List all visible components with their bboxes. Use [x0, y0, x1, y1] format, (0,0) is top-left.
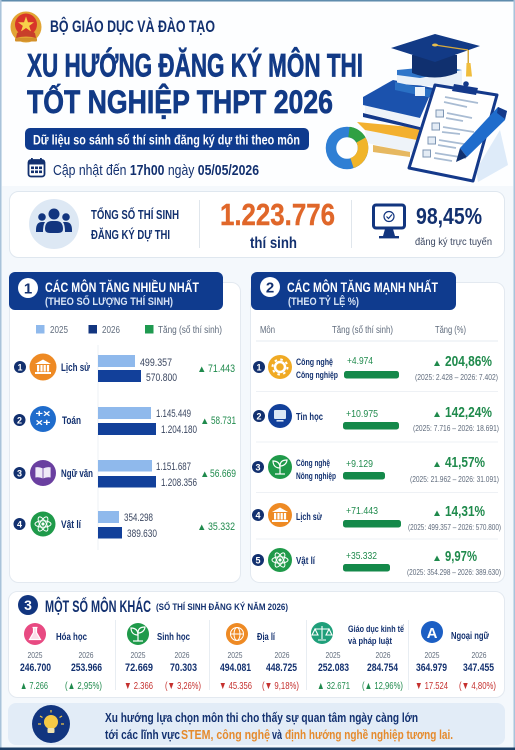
- row: Toán: 1.204.180: [161, 424, 197, 436]
- row: Công nghệ Nông nghiệp: 3: [255, 462, 261, 472]
- heading 2: CÁC MÔN TĂNG MẠNH NHẤT: [287, 278, 438, 295]
- row: Lịch sử: 14,31%: [445, 503, 485, 520]
- row: Lịch sử: Lịch sử: [296, 511, 322, 523]
- subject: Địa lí: [219, 623, 299, 692]
- icon: light bulb: [32, 705, 70, 743]
- row: Lịch sử: 71.443: [208, 363, 235, 375]
- subject: Ngoại ngữ: (▼ 4,80%): [459, 680, 496, 692]
- total number: 1.223.776: [220, 197, 335, 232]
- row: Lịch sử: [14, 354, 235, 384]
- table header: Tăng (%): [435, 324, 466, 336]
- panel 1: largest increases by count: [9, 272, 240, 582]
- table header: [260, 324, 466, 336]
- subject: Ngoại ngữ: Ngoại ngữ: [451, 630, 489, 642]
- subject: Địa lí: (▼ 9,18%): [262, 680, 299, 692]
- subject: Địa lí: 494.081: [220, 662, 251, 674]
- row: Tin học: 142,24%: [445, 404, 492, 421]
- row: Vật lí: 9,97%: [445, 548, 477, 565]
- total number: thí sinh: [250, 235, 297, 252]
- subject: Sinh học: 72.669: [125, 662, 153, 674]
- row: Tin học: 2: [256, 412, 262, 422]
- subject: Giáo dục kinh tế và pháp luật: và pháp luật: [348, 636, 393, 647]
- heading 2: 2: [266, 280, 274, 296]
- subject: Địa lí: 2025: [228, 651, 243, 660]
- row: Lịch sử: 4: [255, 510, 261, 520]
- row: Vật lí: [14, 511, 235, 540]
- heading 3: MỘT SỐ MÔN KHÁC: [45, 596, 151, 616]
- row: Tin học: Tin học: [296, 411, 323, 423]
- subject: Sinh học: Sinh học: [157, 631, 190, 643]
- pen shadow: [476, 130, 508, 182]
- row: Ngữ văn: 3: [17, 468, 22, 478]
- panel 2: largest increases by percent: [250, 272, 504, 582]
- heading 3: (SỐ THÍ SINH ĐĂNG KÝ NĂM 2026): [156, 601, 288, 612]
- icon: national emblem: [10, 12, 42, 42]
- row: Tin học: [253, 404, 499, 433]
- callout text: định hướng nghề nghiệp tương lai.: [285, 727, 453, 742]
- heading 2: [251, 272, 456, 310]
- subject: Ngoại ngữ: 364.979: [416, 662, 447, 674]
- row: Toán: 58.731: [211, 415, 236, 427]
- label: total candidates: TỔNG SỐ THÍ SINH: [91, 207, 179, 222]
- icon: clipboard: [409, 81, 497, 181]
- subject: Sinh học: 70.303: [170, 662, 197, 674]
- row: Lịch sử: 499.357: [140, 357, 172, 369]
- subject: Hóa học: (▲ 2,95%): [65, 680, 102, 692]
- row: Công nghệ Công nghiệp: [253, 353, 498, 382]
- row: Vật lí: 5: [255, 556, 261, 566]
- callout text: Xu hướng lựa chọn môn thi cho thấy sự quan tâm ngày càng lớn: [105, 710, 418, 725]
- subject: Ngoại ngữ: 2026: [472, 651, 487, 660]
- row: Vật lí: [252, 548, 501, 577]
- icon: calendar: [28, 158, 44, 176]
- row: Công nghệ Nông nghiệp: Nông nghiệp: [296, 471, 336, 482]
- callout text: STEM, công nghệ: [181, 727, 270, 742]
- subject: Hóa học: Hóa học: [56, 631, 87, 643]
- heading 1: (THEO SỐ LƯỢNG THÍ SINH): [45, 294, 173, 308]
- row: Ngữ văn: 1.151.687: [156, 461, 191, 473]
- legend: [36, 324, 222, 336]
- panel 3: other subjects: [8, 592, 504, 698]
- icon: monitor: [374, 205, 404, 238]
- subject: Ngoại ngữ: ▼ 17.524: [415, 680, 448, 692]
- callout: takeaway: [8, 703, 505, 745]
- title: TỐT NGHIỆP THPT 2026: [27, 84, 333, 120]
- subject: Hóa học: 246.700: [20, 662, 51, 674]
- subject: Hóa học: ▲ 7.266: [20, 680, 48, 692]
- label: total candidates: [91, 207, 179, 242]
- subject: Địa lí: 2026: [274, 651, 290, 660]
- row: Vật lí: 4: [17, 520, 22, 530]
- subject: Giáo dục kinh tế và pháp luật: ▲ 32.671: [317, 680, 350, 692]
- row: Toán: Toán: [62, 415, 81, 427]
- subject: Sinh học: (▼ 3,26%): [165, 680, 201, 692]
- row: Tin học: +10.975: [346, 408, 378, 420]
- heading 3: 3: [24, 597, 32, 613]
- online rate: [415, 203, 492, 248]
- row: Lịch sử: +71.443: [346, 505, 378, 517]
- panel: total candidates: [10, 192, 504, 258]
- row: Vật lí: 389.630: [127, 528, 157, 540]
- label: total candidates: ĐĂNG KÝ DỰ THI: [91, 227, 170, 242]
- subject: Giáo dục kinh tế và pháp luật: Giáo dục kinh tế: [348, 624, 405, 635]
- icon: books stack: [357, 66, 462, 157]
- row: Ngữ văn: [14, 460, 236, 489]
- subject: Hóa học: [20, 623, 102, 692]
- subject: Ngoại ngữ: A: [427, 625, 438, 642]
- row: Toán: [14, 406, 236, 436]
- heading 1: [9, 272, 223, 310]
- online rate: 98,45%: [416, 203, 482, 229]
- heading 1: 1: [24, 280, 32, 298]
- icon: people: [29, 199, 79, 249]
- illustration: books, cap, clipboard, pen: [331, 34, 508, 182]
- row: Vật lí: 354.298: [124, 512, 153, 524]
- icon: pen: [456, 107, 507, 162]
- subject: Sinh học: ▼ 2.366: [124, 680, 153, 692]
- subject: Giáo dục kinh tế và pháp luật: (▲ 12,96%): [362, 680, 403, 692]
- callout text: và: [272, 727, 283, 742]
- subject: Địa lí: ▼ 45.356: [219, 680, 252, 692]
- subject: Giáo dục kinh tế và pháp luật: 284.754: [367, 662, 399, 674]
- row: Ngữ văn: 56.669: [210, 468, 236, 480]
- row: Công nghệ Công nghiệp: Công nghiệp: [296, 370, 338, 381]
- heading 1: CÁC MÔN TĂNG NHIỀU NHẤT: [45, 278, 199, 295]
- row: Lịch sử: Lịch sử: [61, 362, 90, 374]
- subject: Địa lí: Địa lí: [257, 631, 276, 643]
- callout text: [105, 710, 453, 742]
- subject: Hóa học: 253.966: [71, 662, 102, 674]
- subtitle pill: Dữ liệu so sánh số thí sinh đăng ký dự thi theo môn: [33, 132, 300, 148]
- table header: Môn: [260, 324, 275, 336]
- row: Công nghệ Công nghiệp: 1: [256, 362, 262, 372]
- row: Toán: 2: [17, 416, 22, 426]
- subject: Ngoại ngữ: [415, 621, 496, 692]
- row: Công nghệ Công nghiệp: Công nghệ: [296, 357, 333, 368]
- row: Công nghệ Nông nghiệp: 41,57%: [445, 454, 485, 471]
- subject: Hóa học: 2025: [28, 651, 43, 660]
- chart: donut: [331, 132, 363, 164]
- row: Công nghệ Nông nghiệp: +9.129: [346, 458, 373, 470]
- subject: Địa lí: 448.725: [266, 662, 297, 674]
- row: Toán: ×+: [36, 418, 51, 429]
- row: Toán: 1.145.449: [156, 408, 191, 420]
- update date: Cập nhật đến 17h00 ngày 05/05/2026: [53, 163, 259, 179]
- subtitle pill: [25, 128, 309, 150]
- subject: Ngoại ngữ: 2025: [424, 651, 440, 660]
- row: Công nghệ Công nghiệp: 204,86%: [445, 353, 492, 370]
- row: Ngữ văn: Ngữ văn: [61, 468, 93, 480]
- legend: 2026: [102, 324, 120, 336]
- subject: Hóa học: 2026: [78, 651, 94, 660]
- heading 3: [18, 595, 288, 616]
- legend: 2025: [50, 324, 68, 336]
- table header: Tăng (số thí sinh): [332, 324, 393, 336]
- row: Công nghệ Nông nghiệp: [252, 454, 499, 484]
- row: Lịch sử: 570.800: [146, 372, 177, 384]
- header: [2, 2, 513, 186]
- title: [27, 48, 363, 120]
- callout text: tới các lĩnh vực: [105, 727, 180, 742]
- row: Vật lí: 35.332: [208, 521, 235, 533]
- subject: Giáo dục kinh tế và pháp luật: 252.083: [318, 662, 349, 674]
- row: Vật lí: Vật lí: [296, 555, 316, 567]
- row: Công nghệ Nông nghiệp: Công nghệ: [296, 458, 330, 469]
- row: Lịch sử: 1: [17, 362, 23, 372]
- total number: [220, 197, 335, 252]
- subject: Sinh học: [124, 623, 201, 692]
- row: Công nghệ Công nghiệp: +4.974: [347, 355, 373, 367]
- title: XU HƯỚNG ĐĂNG KÝ MÔN THI: [27, 48, 363, 84]
- icon: graduation cap: [391, 34, 480, 78]
- ministry name: BỘ GIÁO DỤC VÀ ĐÀO TẠO: [50, 17, 215, 36]
- subject: Ngoại ngữ: 347.455: [463, 662, 494, 674]
- online rate: đăng ký trực tuyến: [415, 236, 492, 248]
- row: Vật lí: Vật lí: [61, 519, 82, 531]
- subject: Sinh học: 2026: [174, 651, 190, 660]
- legend: Tăng (số thí sinh): [158, 324, 222, 336]
- row: Vật lí: +35.332: [346, 550, 377, 562]
- row: Ngữ văn: 1.208.356: [161, 477, 197, 489]
- subject: Giáo dục kinh tế và pháp luật: [311, 622, 405, 692]
- subject: Giáo dục kinh tế và pháp luật: 2026: [376, 651, 391, 660]
- subject: Sinh học: 2025: [130, 651, 146, 660]
- subject: Giáo dục kinh tế và pháp luật: 2025: [326, 651, 341, 660]
- heading 2: (THEO TỶ LỆ %): [288, 295, 359, 308]
- row: Toán: +×: [36, 409, 51, 420]
- row: Lịch sử: [252, 503, 501, 532]
